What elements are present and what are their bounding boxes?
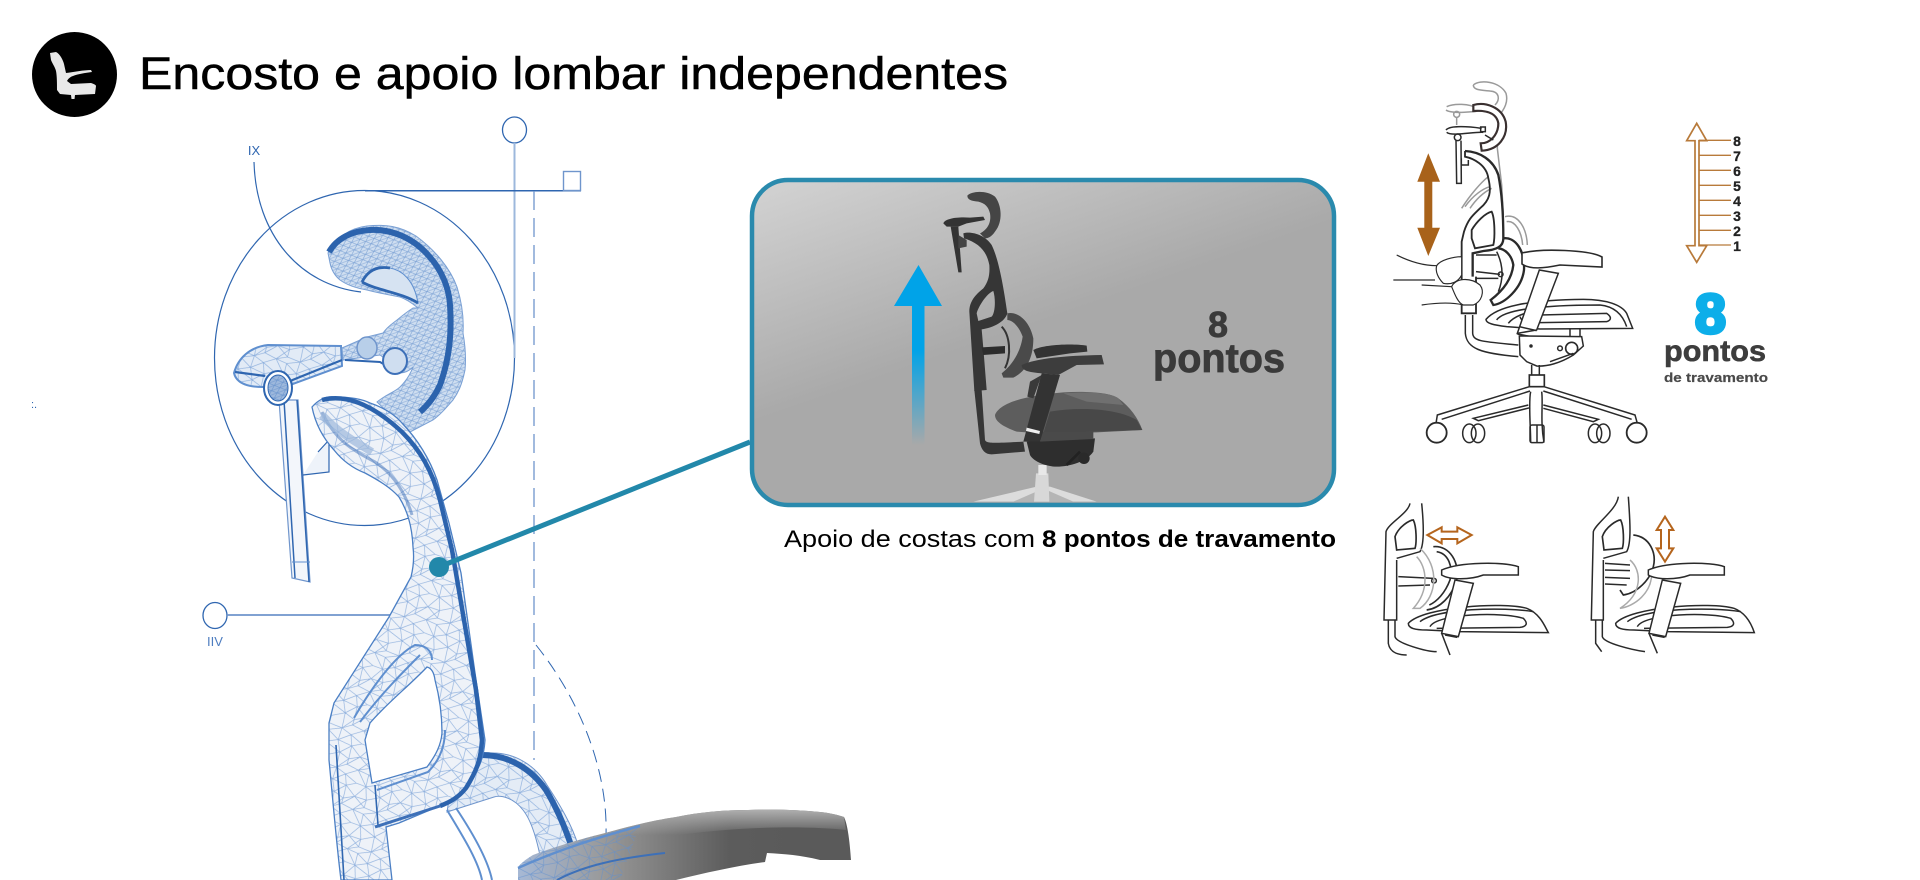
scale: 8 lock points: 8 xyxy=(1733,133,1741,149)
wireframe chair: headrest, back frame and armrest xyxy=(234,225,851,880)
lower chair xyxy=(1427,270,1647,443)
small mark: :. xyxy=(31,399,37,411)
text: big 8 pontos de travamento xyxy=(1664,282,1768,385)
icon: chair in black circle xyxy=(32,32,117,117)
back frame xyxy=(312,397,485,880)
scale: 8 lock points: 6 xyxy=(1733,163,1741,179)
text: big 8 pontos de travamento: pontos xyxy=(1664,335,1766,368)
text: big 8 pontos de travamento: de travamento xyxy=(1664,370,1768,385)
headrest xyxy=(1473,104,1506,151)
scale: 8 lock points: 1 xyxy=(1733,238,1741,254)
panel: 8 pontos photo xyxy=(752,180,1334,505)
hands xyxy=(1393,255,1463,305)
lumbar xyxy=(1491,238,1524,305)
label: IIV: IIV xyxy=(207,634,223,649)
title: Encosto e apoio lombar independentes xyxy=(139,48,1008,99)
scale: 8 lock points: 2 xyxy=(1733,223,1741,239)
scale: 8 lock points xyxy=(1687,123,1741,262)
back frame xyxy=(1465,151,1503,277)
connector line xyxy=(429,442,750,577)
arrow: blue up xyxy=(894,265,942,445)
arrow: brown double vertical xyxy=(1417,153,1440,256)
scale: 8 lock points: 3 xyxy=(1733,208,1741,224)
scale: 8 lock points: 7 xyxy=(1733,148,1741,164)
caption xyxy=(784,526,1336,553)
upper chair xyxy=(1393,82,1527,313)
caption: Apoio de costas com xyxy=(784,526,1035,553)
text: 8 pontos xyxy=(1153,304,1285,381)
line drawing: lumbar depth adjustment xyxy=(1384,503,1548,655)
arrow: horizontal double xyxy=(1427,527,1472,543)
armrest xyxy=(1522,250,1602,268)
scale: 8 lock points: 4 xyxy=(1733,193,1741,209)
label: IX: IX xyxy=(248,143,260,158)
ghost raised position xyxy=(1446,82,1527,245)
text: 8 pontos: 8 xyxy=(1208,304,1228,345)
text: big 8 pontos de travamento: 8 xyxy=(1695,282,1726,345)
lumbar arch behind frame xyxy=(447,753,578,880)
headrest arm and rod xyxy=(234,345,342,582)
text: 8 pontos: pontos xyxy=(1153,335,1285,381)
arrow: vertical double xyxy=(1657,517,1673,562)
photo: dark chair xyxy=(943,192,1142,502)
line drawing: chair with height adjustment xyxy=(1393,82,1647,443)
scale: 8 lock points: 5 xyxy=(1733,178,1741,194)
armrest xyxy=(518,810,851,880)
technical construction lines xyxy=(203,117,606,880)
caption: 8 pontos de travamento xyxy=(1042,526,1336,553)
headrest xyxy=(328,225,466,432)
line drawing: lumbar height adjustment xyxy=(1591,497,1754,653)
